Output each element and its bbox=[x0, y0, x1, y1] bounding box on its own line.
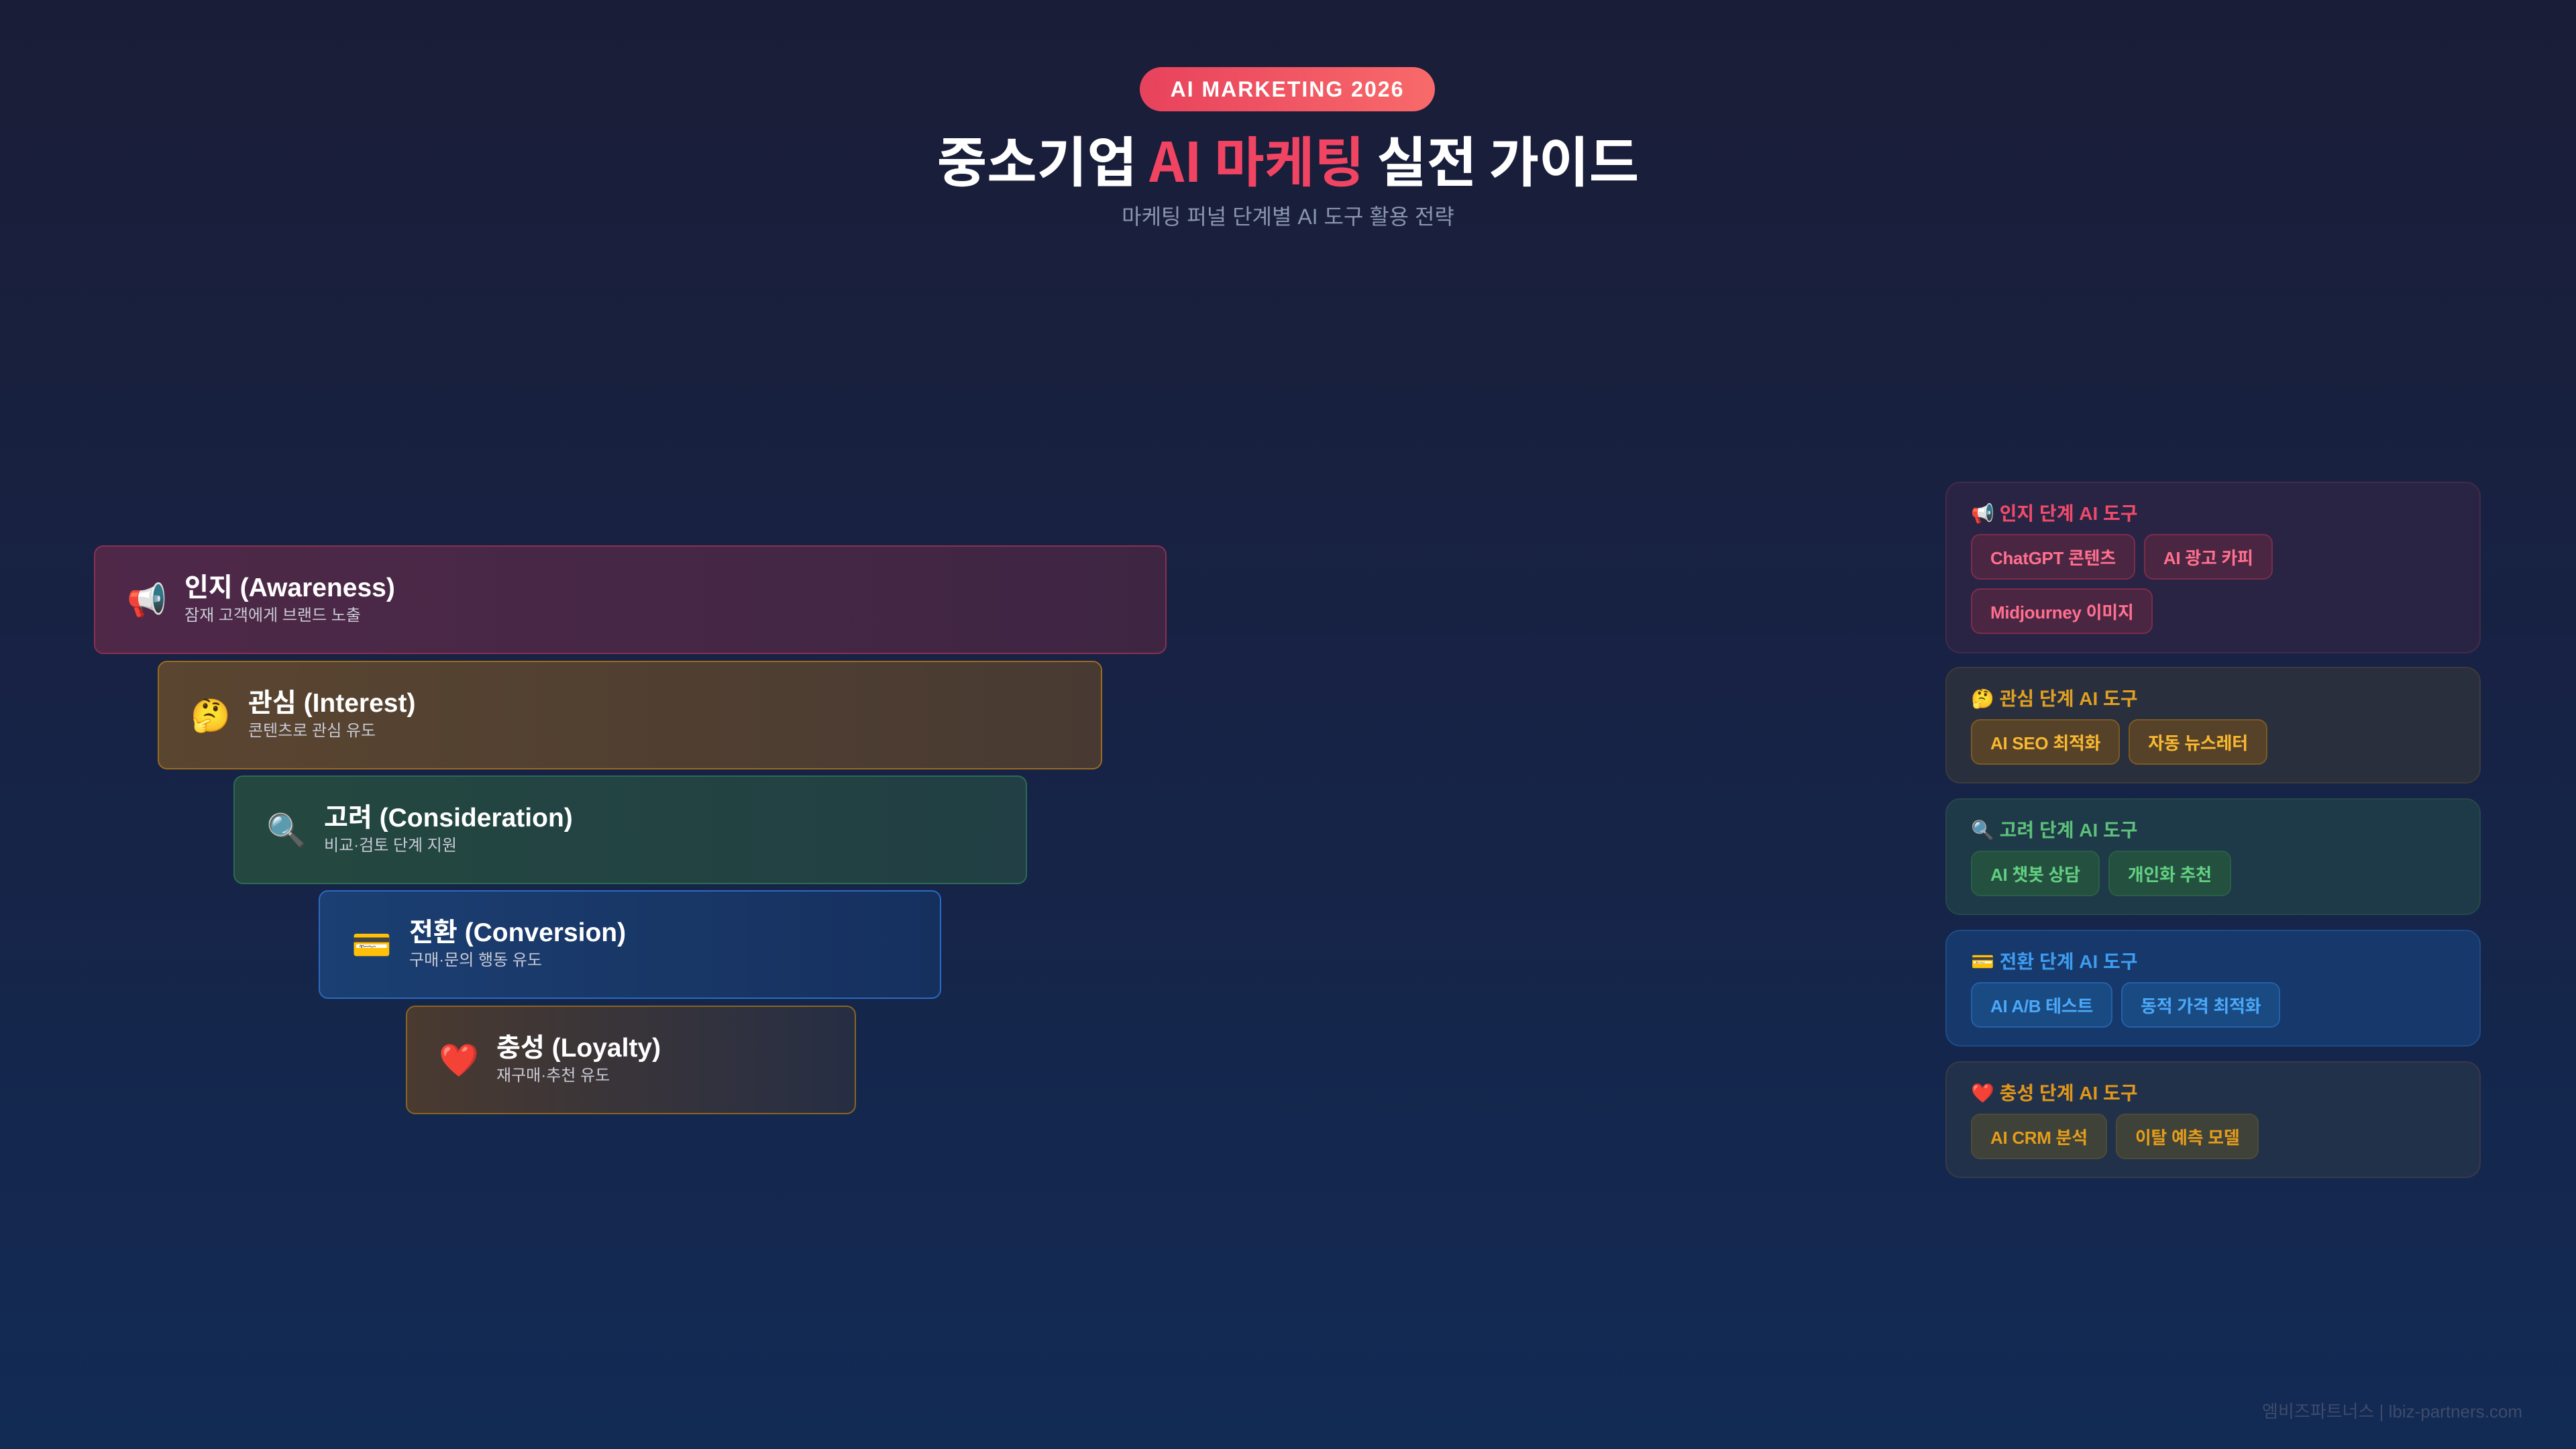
text: interest: 콘텐츠로 관심 유도 bbox=[248, 722, 376, 740]
badge: AI MARKETING 2026 bbox=[1171, 76, 1404, 101]
icon: credit card: 💳 bbox=[352, 926, 392, 963]
chips: conversion bbox=[1971, 982, 2280, 1028]
text: awareness: 인지 (Awareness) bbox=[184, 574, 395, 602]
icon: megaphone: 📢 bbox=[127, 581, 167, 619]
icon: heart: ❤️ bbox=[439, 1041, 479, 1079]
icon: magnifier: 🔍 bbox=[266, 810, 307, 849]
text: interest: 관심 (Interest) bbox=[248, 689, 415, 718]
heading: interest tools: 🤔 관심 단계 AI 도구 bbox=[1971, 688, 2138, 709]
chips: consideration: AI 챗봇 상담 bbox=[1990, 864, 2080, 884]
chips: conversion: 동적 가격 최적화 bbox=[2141, 996, 2261, 1016]
chips: loyalty bbox=[1971, 1114, 2259, 1159]
funnel bar: loyalty bbox=[406, 1006, 856, 1114]
text: awareness bbox=[184, 574, 395, 625]
chips: interest bbox=[1971, 719, 2267, 765]
footer: 엠비즈파트너스 | lbiz-partners.com bbox=[2262, 1401, 2522, 1421]
text: loyalty: 충성 (Loyalty) bbox=[496, 1034, 661, 1063]
chips: interest: AI SEO 최적화 bbox=[1990, 733, 2100, 753]
chips: consideration: 개인화 추천 bbox=[2128, 864, 2212, 884]
chips: conversion: AI A/B 테스트 bbox=[1990, 996, 2093, 1016]
text: conversion: 전환 (Conversion) bbox=[409, 918, 626, 947]
heading: awareness tools: 📢 인지 단계 AI 도구 bbox=[1971, 503, 2138, 524]
text: awareness: 잠재 고객에게 브랜드 노출 bbox=[184, 606, 361, 625]
text: consideration: 비교·검토 단계 지원 bbox=[324, 837, 457, 855]
text: conversion: 구매·문의 행동 유도 bbox=[409, 951, 542, 969]
title: 중소기업 AI 마케팅 실전 가이드 bbox=[937, 119, 1639, 198]
heading: conversion tools: 💳 전환 단계 AI 도구 bbox=[1971, 951, 2138, 972]
chips: awareness: Midjourney 이미지 bbox=[1990, 602, 2133, 623]
chips: awareness bbox=[1971, 534, 2273, 634]
funnel bar: interest bbox=[158, 661, 1102, 769]
funnel bar: conversion bbox=[319, 890, 941, 999]
heading: loyalty tools: ❤️ 충성 단계 AI 도구 bbox=[1971, 1083, 2138, 1104]
funnel bar: awareness bbox=[94, 545, 1167, 654]
text: consideration: 고려 (Consideration) bbox=[324, 804, 573, 833]
subtitle: 마케팅 퍼널 단계별 AI 도구 활용 전략 bbox=[1122, 205, 1454, 229]
panel: loyalty tools bbox=[1945, 1061, 2481, 1178]
text: consideration bbox=[324, 804, 573, 855]
panel: consideration tools bbox=[1945, 798, 2481, 915]
chips: awareness: AI 광고 카피 bbox=[2163, 547, 2253, 568]
chips: loyalty: AI CRM 분석 bbox=[1990, 1127, 2088, 1147]
badge bbox=[1140, 67, 1435, 111]
panel: interest tools bbox=[1945, 667, 2481, 784]
text: interest bbox=[248, 689, 415, 740]
chips: awareness: ChatGPT 콘텐츠 bbox=[1990, 547, 2116, 568]
chips: consideration bbox=[1971, 851, 2231, 896]
heading: consideration tools: 🔍 고려 단계 AI 도구 bbox=[1971, 820, 2138, 841]
text: loyalty bbox=[496, 1034, 661, 1085]
text: loyalty: 재구매·추천 유도 bbox=[496, 1067, 610, 1085]
funnel bar: consideration bbox=[233, 775, 1027, 884]
text: conversion bbox=[409, 918, 626, 969]
chips: loyalty: 이탈 예측 모델 bbox=[2135, 1127, 2239, 1147]
panel: conversion tools bbox=[1945, 930, 2481, 1046]
panel: awareness tools bbox=[1945, 482, 2481, 653]
icon: thinking face: 🤔 bbox=[191, 696, 231, 734]
chips: interest: 자동 뉴스레터 bbox=[2148, 733, 2248, 753]
